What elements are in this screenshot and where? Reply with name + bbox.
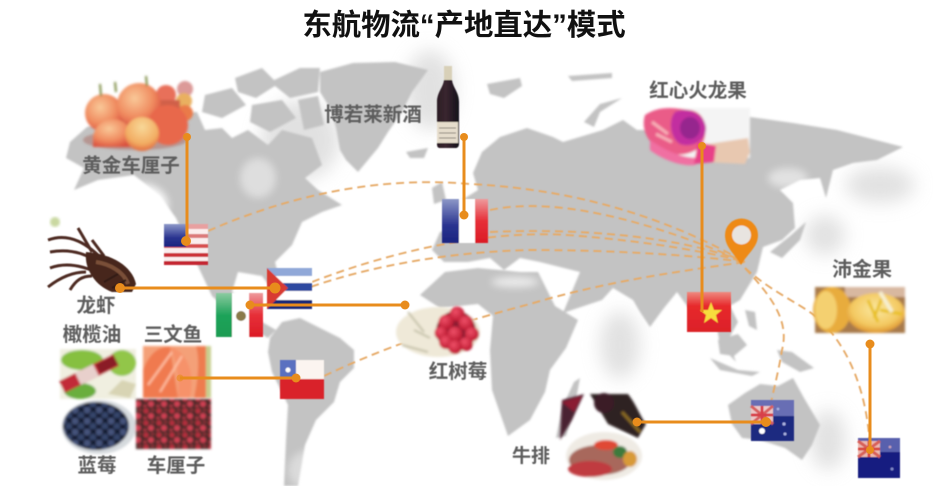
image: dragon fruit bbox=[644, 108, 750, 165]
connector: salmon to Chile bbox=[176, 374, 300, 382]
image: raspberries bbox=[396, 306, 480, 357]
image: golden cherries bbox=[83, 76, 193, 151]
image: cranberries bbox=[136, 399, 211, 449]
label: steak: 牛排 bbox=[512, 445, 550, 467]
image: blueberries bbox=[62, 400, 136, 454]
image: steak and wine bbox=[560, 393, 646, 480]
label: golden fruit: 沛金果 bbox=[832, 257, 892, 281]
label: Beaujolais wine: 博若莱新酒 bbox=[324, 104, 422, 126]
icon: flag Chile bbox=[280, 360, 324, 399]
image: wine bottle bbox=[437, 66, 459, 148]
labels bbox=[63, 79, 892, 477]
icon: flag Australia bbox=[751, 400, 794, 441]
icon: flag Mexico bbox=[216, 293, 263, 337]
image: salmon bbox=[143, 346, 211, 398]
icon: flag Cuba bbox=[267, 268, 312, 309]
connector: dragon fruit to Vietnam bbox=[698, 142, 706, 312]
icon: flag France bbox=[442, 199, 488, 243]
connector: raspberries to Mexico bbox=[246, 300, 410, 310]
label: olive oil: 橄榄油 bbox=[63, 324, 121, 346]
icon: flag Vietnam bbox=[687, 292, 731, 332]
connector lines bbox=[115, 133, 874, 454]
map: South America bbox=[268, 318, 354, 486]
connector: wine to France bbox=[460, 133, 468, 220]
map: Australia bbox=[728, 378, 820, 460]
icon: location pin bbox=[725, 219, 758, 265]
image: golden fruit bbox=[813, 287, 905, 333]
image: lobster bbox=[48, 217, 136, 292]
icon: flag New Zealand bbox=[858, 438, 900, 478]
image: olive oil bbox=[60, 349, 136, 399]
label: blueberries: 蓝莓 bbox=[77, 455, 117, 477]
connector: steak to Australia bbox=[632, 417, 771, 427]
label: raspberries: 红树莓 bbox=[429, 360, 487, 383]
map: Eurasia bbox=[432, 117, 903, 362]
label: lobster: 龙虾 bbox=[76, 295, 116, 317]
dashed trade routes bbox=[208, 182, 870, 450]
icon: flag USA bbox=[164, 224, 208, 265]
connector: golden fruit to New Zealand bbox=[866, 340, 874, 454]
label: golden cherries: 黄金车厘子 bbox=[82, 154, 180, 177]
map: North America bbox=[66, 68, 342, 338]
connector: golden cherries to USA bbox=[181, 133, 191, 246]
map: islands bbox=[432, 73, 814, 438]
label: cherries: 车厘子 bbox=[147, 454, 205, 477]
label: red dragon fruit: 红心火龙果 bbox=[649, 79, 747, 102]
map: Africa bbox=[420, 268, 578, 436]
label: salmon: 三文鱼 bbox=[144, 323, 202, 346]
connector: lobster to Cuba bbox=[115, 282, 280, 294]
map: Greenland and Iceland bbox=[320, 62, 428, 172]
title: 东航物流“产地直达”模式 bbox=[302, 9, 626, 42]
